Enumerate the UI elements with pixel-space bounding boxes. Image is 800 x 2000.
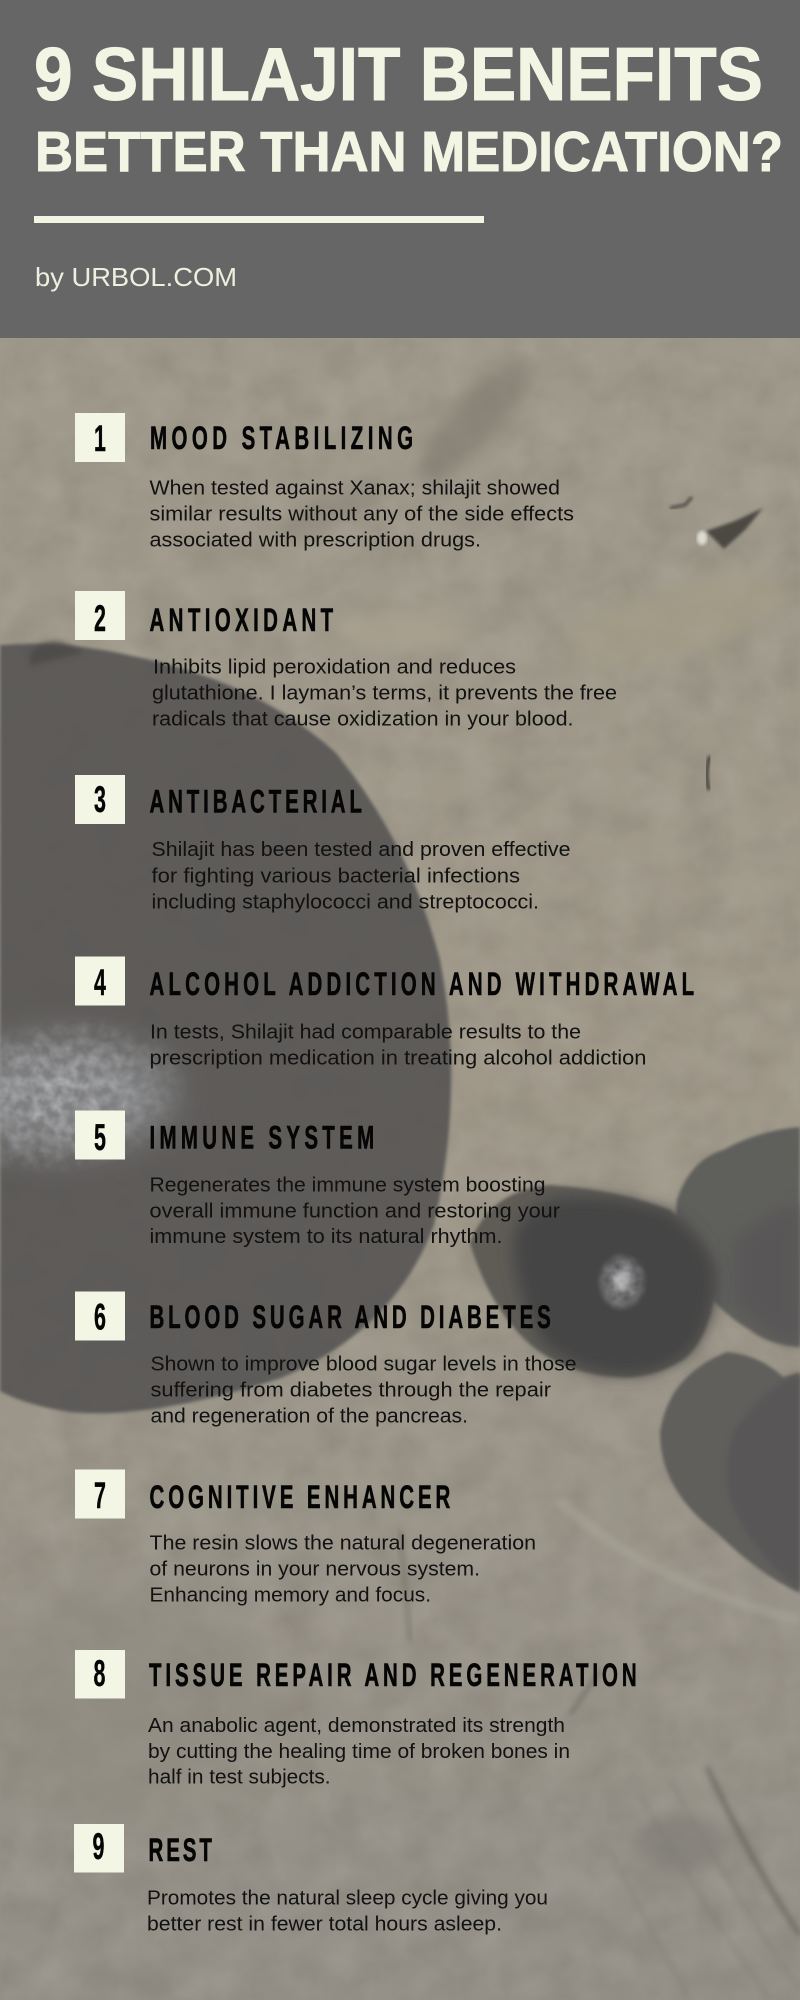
byline: by URBOL.COM	[35, 262, 237, 292]
number badge 6	[75, 1292, 125, 1340]
number badge 5	[75, 1110, 125, 1160]
body 7: Enhancing memory and focus.	[150, 1583, 431, 1606]
body 6	[150, 1352, 576, 1427]
rock cracks	[400, 497, 800, 2000]
number badge 7	[75, 1470, 125, 1518]
body 9	[147, 1886, 548, 1936]
body 1	[150, 477, 574, 551]
title: 9 SHILAJIT BENEFITS	[34, 32, 763, 116]
body 8: An anabolic agent, demonstrated its strength	[148, 1714, 565, 1737]
number badge 4	[75, 956, 125, 1006]
item 5: immune system	[75, 1110, 560, 1248]
number badge 2: 2	[94, 599, 106, 640]
body 3: Shilajit has been tested and proven effective	[152, 838, 570, 861]
heading 3: ANTIBACTERIAL	[150, 784, 362, 820]
body 6: Shown to improve blood sugar levels in those	[150, 1352, 576, 1376]
body 4: In tests, Shilajit had comparable results to the	[150, 1020, 581, 1043]
body 4: prescription medication in treating alcohol addiction	[150, 1047, 646, 1070]
body 1: associated with prescription drugs.	[150, 528, 481, 551]
item 4: alcohol addiction	[75, 956, 694, 1070]
item 2: antioxidant	[75, 591, 617, 730]
number badge 9	[74, 1824, 124, 1872]
body 9: Promotes the natural sleep cycle giving you	[147, 1886, 548, 1909]
number badge 3: 3	[94, 780, 106, 821]
body 2: Inhibits lipid peroxidation and reduces	[153, 655, 516, 678]
heading 7: COGNITIVE ENHANCER	[150, 1479, 450, 1515]
body 4	[150, 1020, 646, 1070]
body 5	[150, 1173, 560, 1248]
body 5: Regenerates the immune system boosting	[150, 1173, 546, 1196]
body 5: immune system to its natural rhythm.	[150, 1225, 503, 1248]
item 3: antibacterial	[75, 775, 570, 914]
large dark stone	[0, 644, 451, 1413]
number badge 6: 6	[94, 1298, 106, 1338]
title divider	[34, 216, 484, 223]
body 7: of neurons in your nervous system.	[150, 1558, 480, 1581]
body 3	[152, 838, 570, 914]
item 9: rest	[74, 1824, 548, 1936]
body 1: When tested against Xanax; shilajit showed	[150, 477, 560, 500]
heading 2: ANTIOXIDANT	[150, 602, 334, 638]
number badge 8	[75, 1650, 125, 1698]
lower right stone	[660, 1352, 800, 1593]
header band	[0, 0, 800, 338]
item 1: mood stabilizing	[75, 413, 574, 551]
item 8: tissue repair	[75, 1650, 637, 1789]
middle small stone	[470, 1185, 717, 1377]
body 6: and regeneration of the pancreas.	[150, 1404, 468, 1427]
body 8: by cutting the healing time of broken bones in	[148, 1740, 570, 1763]
body 2: radicals that cause oxidization in your blood.	[152, 707, 574, 730]
number badge 2	[75, 591, 125, 640]
body 8	[148, 1714, 570, 1789]
upper right stone	[676, 1127, 800, 1347]
stone highlight	[0, 1020, 187, 1172]
body 7: The resin slows the natural degeneration	[150, 1532, 536, 1554]
number badge 5: 5	[94, 1118, 106, 1159]
title	[34, 32, 783, 184]
body 3: for fighting various bacterial infections	[152, 864, 520, 887]
heading 8: TISSUE REPAIR AND REGENERATION	[149, 1657, 637, 1693]
body 2: glutathione. I layman’s terms, it prevents the free	[152, 682, 617, 705]
number badge 4: 4	[94, 963, 106, 1004]
number badge 8: 8	[94, 1654, 105, 1695]
item 6: blood sugar	[75, 1292, 576, 1427]
number badge 1: 1	[94, 419, 106, 460]
number badge 3	[75, 775, 125, 824]
heading 4: ALCOHOL ADDICTION AND WITHDRAWAL	[150, 966, 694, 1002]
heading 6: BLOOD SUGAR AND DIABETES	[150, 1299, 551, 1335]
item 7: cognitive enhancer	[75, 1470, 536, 1606]
body 5: overall immune function and restoring your	[150, 1200, 560, 1222]
number badge 7: 7	[94, 1476, 106, 1517]
body 3: including staphylococci and streptococci.	[152, 890, 539, 914]
body 2	[152, 655, 617, 730]
body 9: better rest in fewer total hours asleep.	[147, 1913, 502, 1936]
heading 1: MOOD STABILIZING	[150, 420, 413, 456]
body 1: similar results without any of the side effects	[150, 503, 574, 526]
number badge 1	[75, 413, 125, 462]
heading 5: IMMUNE SYSTEM	[150, 1120, 374, 1156]
body 7	[150, 1532, 536, 1606]
heading 9: REST	[148, 1832, 212, 1868]
body 6: suffering from diabetes through the repair	[150, 1379, 551, 1402]
number badge 9: 9	[93, 1827, 104, 1868]
body 8: half in test subjects.	[148, 1766, 331, 1789]
